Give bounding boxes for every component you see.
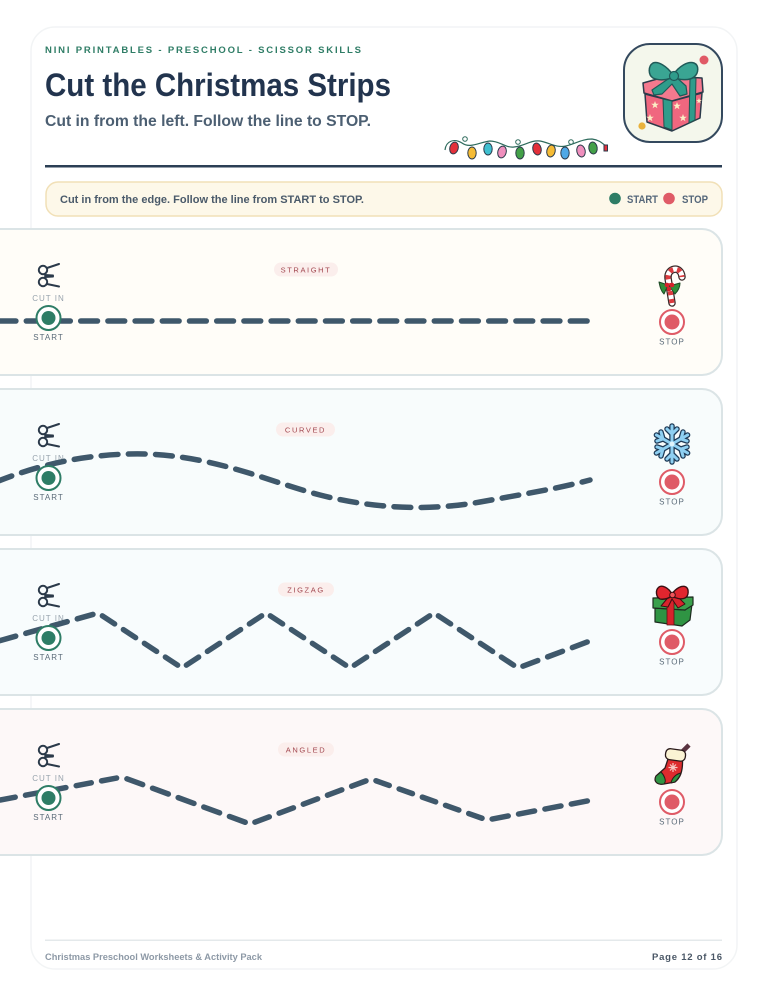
label: start: START (33, 653, 64, 662)
label: start: START (33, 493, 64, 502)
label: cut in: CUT IN (32, 774, 65, 783)
label: stop: STOP (659, 338, 685, 346)
stop marker (660, 790, 684, 814)
pill: zigzag (278, 582, 334, 596)
panel: angled strip (0, 709, 722, 855)
instruction bar: Cut in from the edge. Follow the line from START to STOP. (60, 194, 364, 206)
label: cut in: CUT IN (32, 454, 65, 463)
icon: green gift (653, 586, 693, 626)
instruction bar: STOP (682, 194, 708, 206)
label: start: START (33, 813, 64, 822)
dashed cut line: zigzag (0, 613, 592, 668)
icon: Christmas lights garland (445, 137, 608, 159)
label: stop: STOP (659, 498, 685, 506)
start marker (36, 466, 60, 490)
stop marker (660, 310, 684, 334)
pill: curved: CURVED (285, 426, 326, 434)
label: stop: STOP (659, 658, 685, 666)
divider rule (45, 165, 722, 168)
pill: straight: STRAIGHT (281, 266, 331, 274)
footer left text: Christmas Preschool Worksheets & Activity Pack (45, 952, 263, 963)
icon: snowflake (656, 426, 688, 462)
icon: scissors (39, 424, 59, 446)
label: cut in: CUT IN (32, 294, 65, 303)
icon: gift badge (624, 44, 722, 142)
pill: zigzag: ZIGZAG (287, 586, 325, 594)
icon: scissors (39, 744, 59, 766)
pill: straight (274, 262, 338, 276)
label: cut in: CUT IN (32, 614, 65, 623)
label: start: START (33, 333, 64, 342)
dashed cut line: curved (0, 454, 590, 507)
icon: scissors (39, 264, 59, 286)
stop marker (660, 630, 684, 654)
panel: straight strip (0, 229, 722, 375)
start marker (36, 306, 60, 330)
instruction bar (46, 182, 722, 216)
stop marker (660, 470, 684, 494)
icon: scissors (39, 584, 59, 606)
dashed cut line: straight (0, 318, 587, 324)
pill: angled (278, 742, 334, 756)
subtitle: Cut in from the left. Follow the line to STOP. (45, 113, 371, 130)
title: Cut the Christmas Strips (45, 67, 391, 103)
icon: candy cane (659, 269, 682, 303)
icon: stocking (655, 745, 689, 784)
footer rule (45, 940, 722, 941)
footer page number: Page 12 of 16 (652, 952, 722, 963)
instruction bar: START (627, 194, 658, 206)
panel: curved strip (0, 389, 722, 535)
eyebrow: NINI PRINTABLES - PRESCHOOL - SCISSOR SKILLS (45, 45, 361, 56)
panel: zigzag strip (0, 549, 722, 695)
pill: angled: ANGLED (286, 746, 326, 754)
start marker (36, 626, 60, 650)
start marker (36, 786, 60, 810)
pill: curved (276, 422, 335, 436)
label: stop: STOP (659, 818, 685, 826)
dashed cut line: angled (0, 777, 592, 824)
